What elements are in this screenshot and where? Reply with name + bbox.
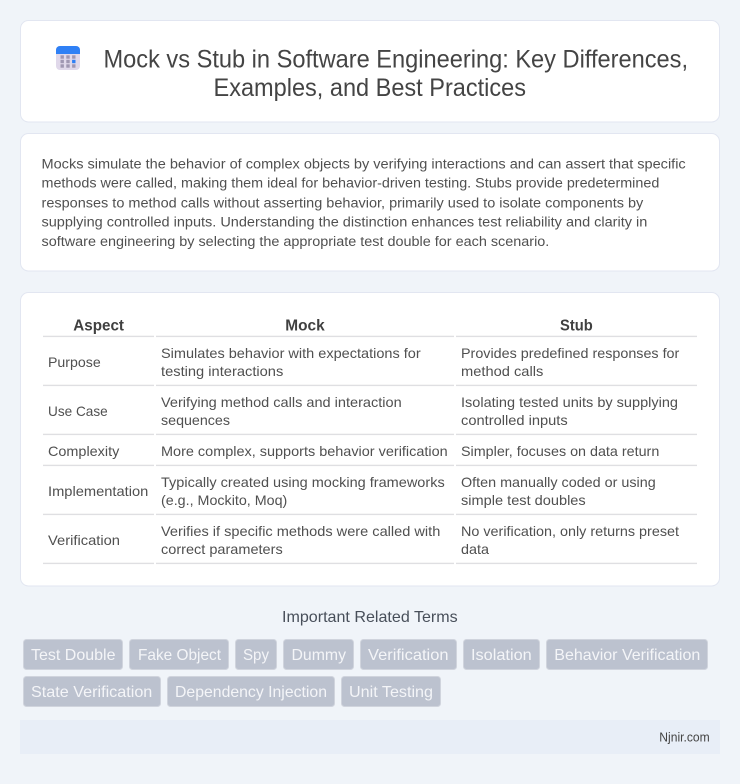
text block: summary paragraph: Mocks simulate the behavior of complex objects by verifying interactions and can assert that specific xyxy=(42,156,686,172)
table row: Purpose: Provides predefined responses for xyxy=(461,345,680,361)
tag: Test Double xyxy=(24,640,122,670)
text block: summary paragraph: software engineering by selecting the appropriate test double for each scenario. xyxy=(42,234,549,250)
table row: Implementation: Often manually coded or using xyxy=(461,474,656,490)
table row: Implementation: simple test doubles xyxy=(461,492,586,508)
tag: State Verification: State Verification xyxy=(31,684,152,701)
table row: Complexity xyxy=(43,443,697,466)
tag: Isolation xyxy=(464,640,540,670)
table row: Use Case: Verifying method calls and interaction xyxy=(161,394,402,410)
tag: Spy: Spy xyxy=(243,647,269,664)
table row: Purpose: Purpose xyxy=(48,354,101,370)
table row: Verification: Verification xyxy=(48,532,120,548)
table row: Complexity: More complex, supports behavior verification xyxy=(161,443,448,459)
tag: Dependency Injection xyxy=(168,676,334,706)
table row: Purpose: method calls xyxy=(461,363,543,379)
table row: Complexity: Complexity xyxy=(48,443,119,459)
table row: Implementation: Typically created using mocking frameworks xyxy=(161,474,445,490)
tag: Fake Object xyxy=(130,640,228,670)
title: Examples, and Best Practices xyxy=(214,74,526,102)
table row: Implementation xyxy=(43,474,697,515)
tag: State Verification xyxy=(24,676,160,706)
table row: Verification: correct parameters xyxy=(161,541,283,557)
tag: Behavior Verification: Behavior Verification xyxy=(554,647,700,664)
tag: Dummy xyxy=(284,640,354,670)
table row: Use Case: sequences xyxy=(161,412,230,428)
table header row: Stub xyxy=(560,318,593,335)
heading: related terms: Important Related Terms xyxy=(282,609,458,626)
tag: Dependency Injection: Dependency Injection xyxy=(175,684,327,701)
related term tags xyxy=(24,640,708,706)
table row: Use Case xyxy=(43,394,697,435)
text block: summary paragraph: supplying controlled inputs. Understanding the distinction enhances test reliability and clarity in xyxy=(42,215,647,231)
tag: Test Double: Test Double xyxy=(31,647,116,664)
table row: Use Case: Use Case xyxy=(48,403,108,419)
text block: summary paragraph: responses to method calls without asserting behavior, primarily used to isolate components by xyxy=(42,195,644,211)
table header row: Mock xyxy=(285,318,325,335)
table row: Use Case: controlled inputs xyxy=(461,412,568,428)
table row: Purpose xyxy=(43,345,697,386)
title: Mock vs Stub in Software Engineering: Key Differences, xyxy=(104,45,688,73)
panel: introduction text xyxy=(20,134,720,271)
tag: Spy xyxy=(236,640,276,670)
panel: comparison table xyxy=(20,292,720,586)
tag: Unit Testing xyxy=(342,676,440,706)
table header row xyxy=(43,318,697,337)
text block: summary paragraph: methods were called, making them ideal for behavior-driven testing. Stubs provide predetermined xyxy=(42,175,659,191)
tag: Verification xyxy=(360,640,456,670)
footer: Njnir.com xyxy=(659,730,710,744)
icon: calendar xyxy=(56,46,80,70)
table header row: Aspect xyxy=(73,318,125,335)
tag: Isolation: Isolation xyxy=(471,647,532,664)
footer xyxy=(20,720,720,754)
table row: Verification: No verification, only returns preset xyxy=(461,523,679,539)
tag: Verification: Verification xyxy=(368,647,448,664)
table row: Implementation: Implementation xyxy=(48,483,148,499)
tag: Unit Testing: Unit Testing xyxy=(349,684,433,701)
text block: summary paragraph xyxy=(42,156,686,250)
table row: Verification: data xyxy=(461,541,489,557)
tag: Behavior Verification xyxy=(546,640,708,670)
title xyxy=(104,45,688,102)
tag: Fake Object: Fake Object xyxy=(138,647,222,664)
table row: Purpose: testing interactions xyxy=(161,363,283,379)
tag: Dummy: Dummy xyxy=(292,647,346,664)
table row: Use Case: Isolating tested units by supplying xyxy=(461,394,678,410)
panel: title header xyxy=(20,20,720,122)
table row: Implementation: (e.g., Mockito, Moq) xyxy=(161,492,287,508)
table row: Verification xyxy=(43,523,697,564)
table row: Complexity: Simpler, focuses on data return xyxy=(461,443,659,459)
table row: Verification: Verifies if specific methods were called with xyxy=(161,523,440,539)
table row: Purpose: Simulates behavior with expectations for xyxy=(161,345,421,361)
